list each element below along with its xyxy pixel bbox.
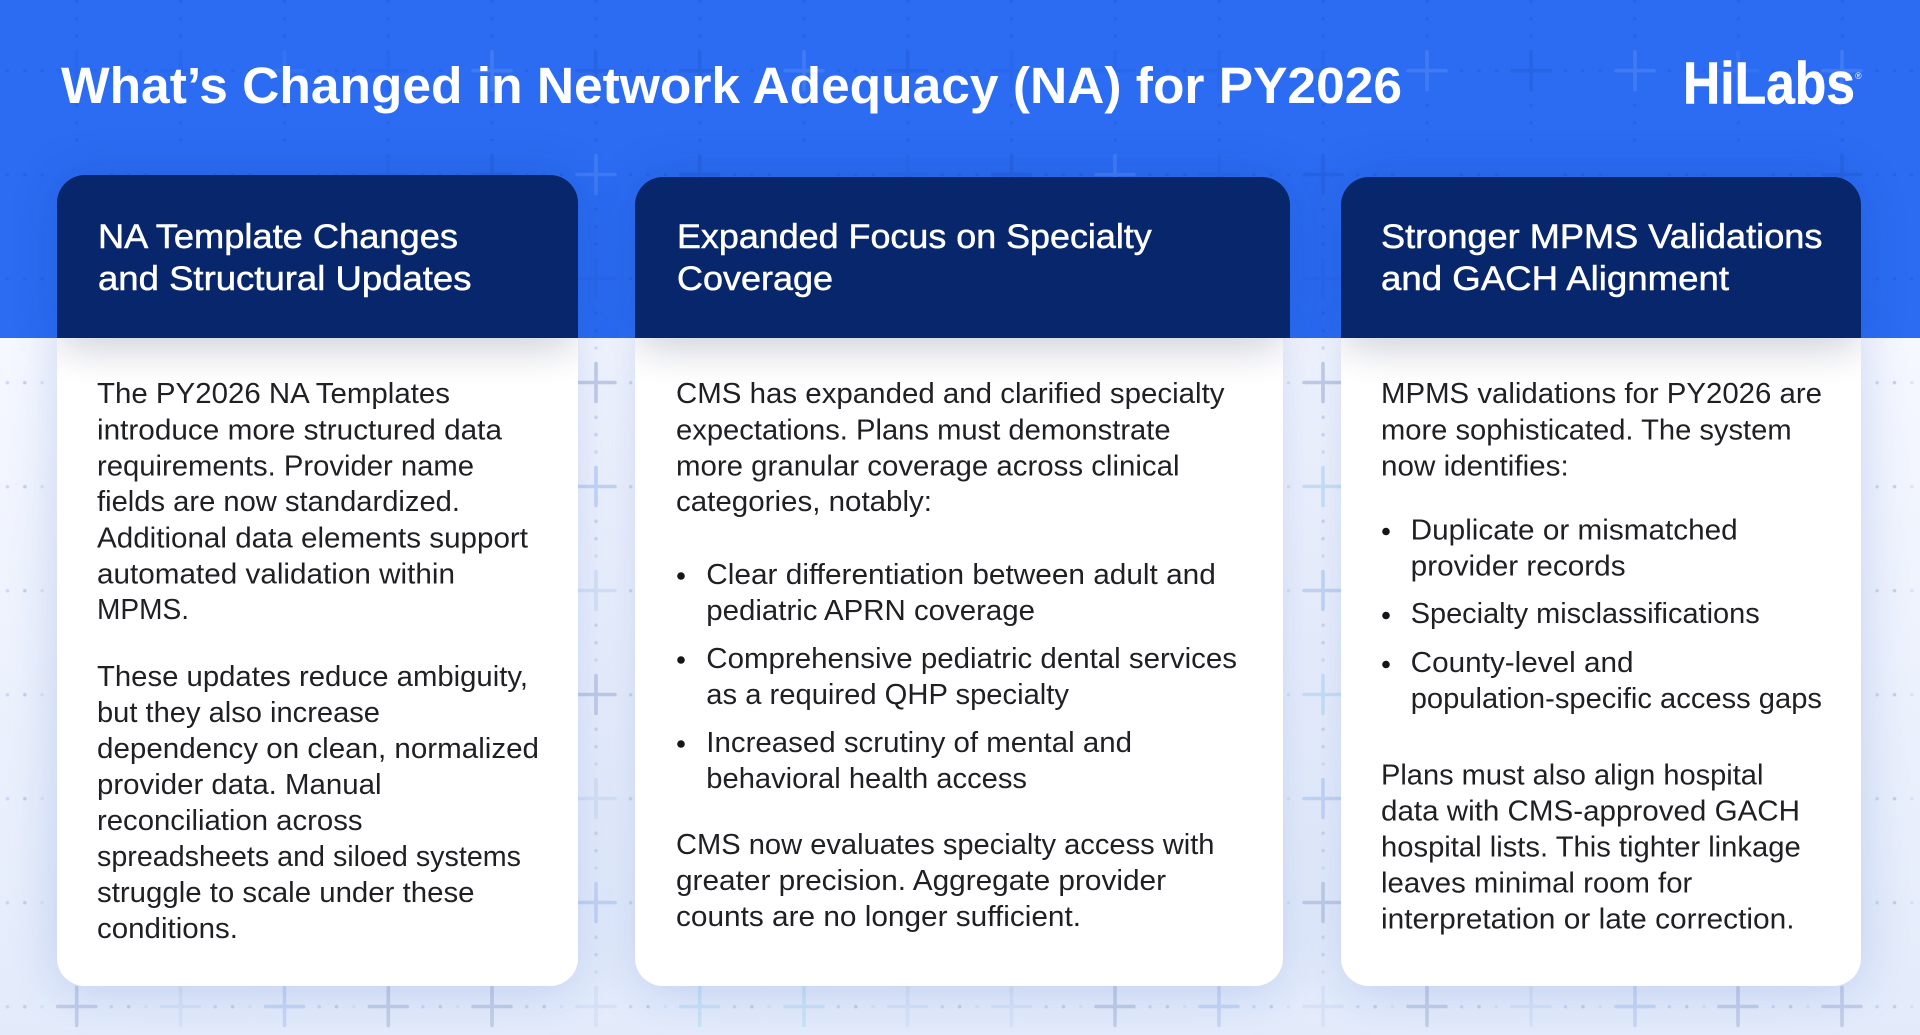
panel: expanded specialty coverage <box>613 172 1306 1010</box>
bullet list: clinical categories: behavioral health access <box>706 763 1027 795</box>
card text <box>1381 218 1822 936</box>
paragraph: specialty expectations: more granular coverage across clinical <box>676 450 1180 482</box>
panel: MPMS validations and GACH alignment <box>1319 172 1883 1010</box>
heading: and GACH Alignment <box>1381 260 1730 298</box>
paragraph: dependency on clean data: provider data. Manual <box>97 769 382 801</box>
paragraph: template requirements: requirements. Provider name <box>97 450 474 482</box>
bullet list: clinical categories: as a required QHP specialty <box>706 679 1069 711</box>
bullet list: clinical categories: Increased scrutiny of mental and <box>706 727 1132 759</box>
bullet list: identified issues <box>1382 514 1822 715</box>
paragraph: MPMS validations <box>1381 378 1822 482</box>
bullet list: identified issues: Duplicate or mismatched <box>1411 514 1738 546</box>
bullet list: identified issues: Specialty misclassifications <box>1411 598 1760 630</box>
heading <box>677 218 1152 298</box>
paragraph: aggregate counts no longer sufficient: greater precision. Aggregate provider <box>676 865 1166 897</box>
paragraph: template requirements: fields are now standardized. <box>97 486 460 518</box>
paragraph: template requirements: introduce more structured data <box>97 414 503 446</box>
paragraph: dependency on clean data: These updates reduce ambiguity, <box>97 661 528 693</box>
heading: Stronger MPMS Validations <box>1381 218 1822 256</box>
paragraph: dependency on clean data: but they also increase <box>97 697 380 729</box>
bullet list: clinical categories: Clear differentiation between adult and <box>706 559 1216 591</box>
paragraph: aggregate counts no longer sufficient: counts are no longer sufficient. <box>676 901 1081 933</box>
card text <box>97 218 539 945</box>
bullet list: identified issues: population-specific access gaps <box>1411 683 1822 715</box>
pale lower background <box>0 338 1920 1035</box>
title: What’s Changed in Network Adequacy (NA) for PY2026 <box>61 57 1402 114</box>
paragraph: template requirements: Additional data elements support <box>97 522 528 554</box>
logo: HiLabs: HiLabs <box>1683 50 1855 116</box>
paragraph: specialty expectations: CMS has expanded and clarified specialty <box>676 378 1225 410</box>
paragraph: dependency on clean data: reconciliation across <box>97 805 362 837</box>
paragraph: GACH hospital alignment: data with CMS-approved GACH <box>1381 796 1800 828</box>
paragraph: GACH hospital alignment: hospital lists. This tighter linkage <box>1381 832 1801 864</box>
paragraph: MPMS validations: MPMS validations for PY2026 are <box>1381 378 1822 410</box>
paragraph: GACH hospital alignment: leaves minimal room for <box>1381 868 1693 900</box>
card body <box>635 338 1283 986</box>
bullet list: clinical categories <box>677 559 1237 795</box>
paragraph: GACH hospital alignment: Plans must also align hospital <box>1381 760 1763 792</box>
paragraph: dependency on clean data: struggle to scale under these <box>97 877 474 909</box>
panel: NA template changes <box>35 170 600 1010</box>
paragraph: dependency on clean data: spreadsheets and siloed systems <box>97 841 521 873</box>
heading: NA Template Changes <box>98 218 458 256</box>
card body <box>1341 338 1861 986</box>
paragraph: template requirements: The PY2026 NA Templates <box>97 378 450 410</box>
heading: Expanded Focus on Specialty <box>677 218 1152 256</box>
paragraph: specialty expectations: expectations. Plans must demonstrate <box>676 414 1171 446</box>
heading: Coverage <box>677 260 833 298</box>
paragraph: aggregate counts no longer sufficient <box>676 829 1214 933</box>
bullet list: identified issues: County-level and <box>1411 647 1634 679</box>
paragraph: GACH hospital alignment: interpretation or late correction. <box>1381 904 1795 936</box>
heading <box>98 218 472 298</box>
bullet list: clinical categories: pediatric APRN coverage <box>706 595 1035 627</box>
paragraph: dependency on clean data <box>97 661 539 945</box>
paragraph: MPMS validations: more sophisticated. The system <box>1381 414 1792 446</box>
bullet list: clinical categories: Comprehensive pediatric dental services <box>706 643 1237 675</box>
paragraph: template requirements: MPMS. <box>97 594 189 626</box>
paragraph: dependency on clean data: dependency on clean, normalized <box>97 733 539 765</box>
card header <box>635 177 1290 338</box>
paragraph: template requirements <box>97 378 528 626</box>
paragraph: specialty expectations <box>676 378 1225 518</box>
logo: HiLabs: ® <box>1855 71 1862 81</box>
heading: and Structural Updates <box>98 260 472 298</box>
card text <box>676 218 1237 933</box>
heading <box>1381 218 1822 298</box>
paragraph: MPMS validations: now identifies: <box>1381 450 1569 482</box>
paragraph: dependency on clean data: conditions. <box>97 913 238 945</box>
paragraph: template requirements: automated validation within <box>97 558 455 590</box>
paragraph: aggregate counts no longer sufficient: CMS now evaluates specialty access with <box>676 829 1214 861</box>
card header <box>57 175 578 338</box>
card header <box>1341 177 1861 338</box>
paragraph: GACH hospital alignment <box>1381 760 1801 936</box>
paragraph: specialty expectations: categories, notably: <box>676 486 932 518</box>
bullet list: identified issues: provider records <box>1411 550 1626 582</box>
card body <box>57 338 578 986</box>
